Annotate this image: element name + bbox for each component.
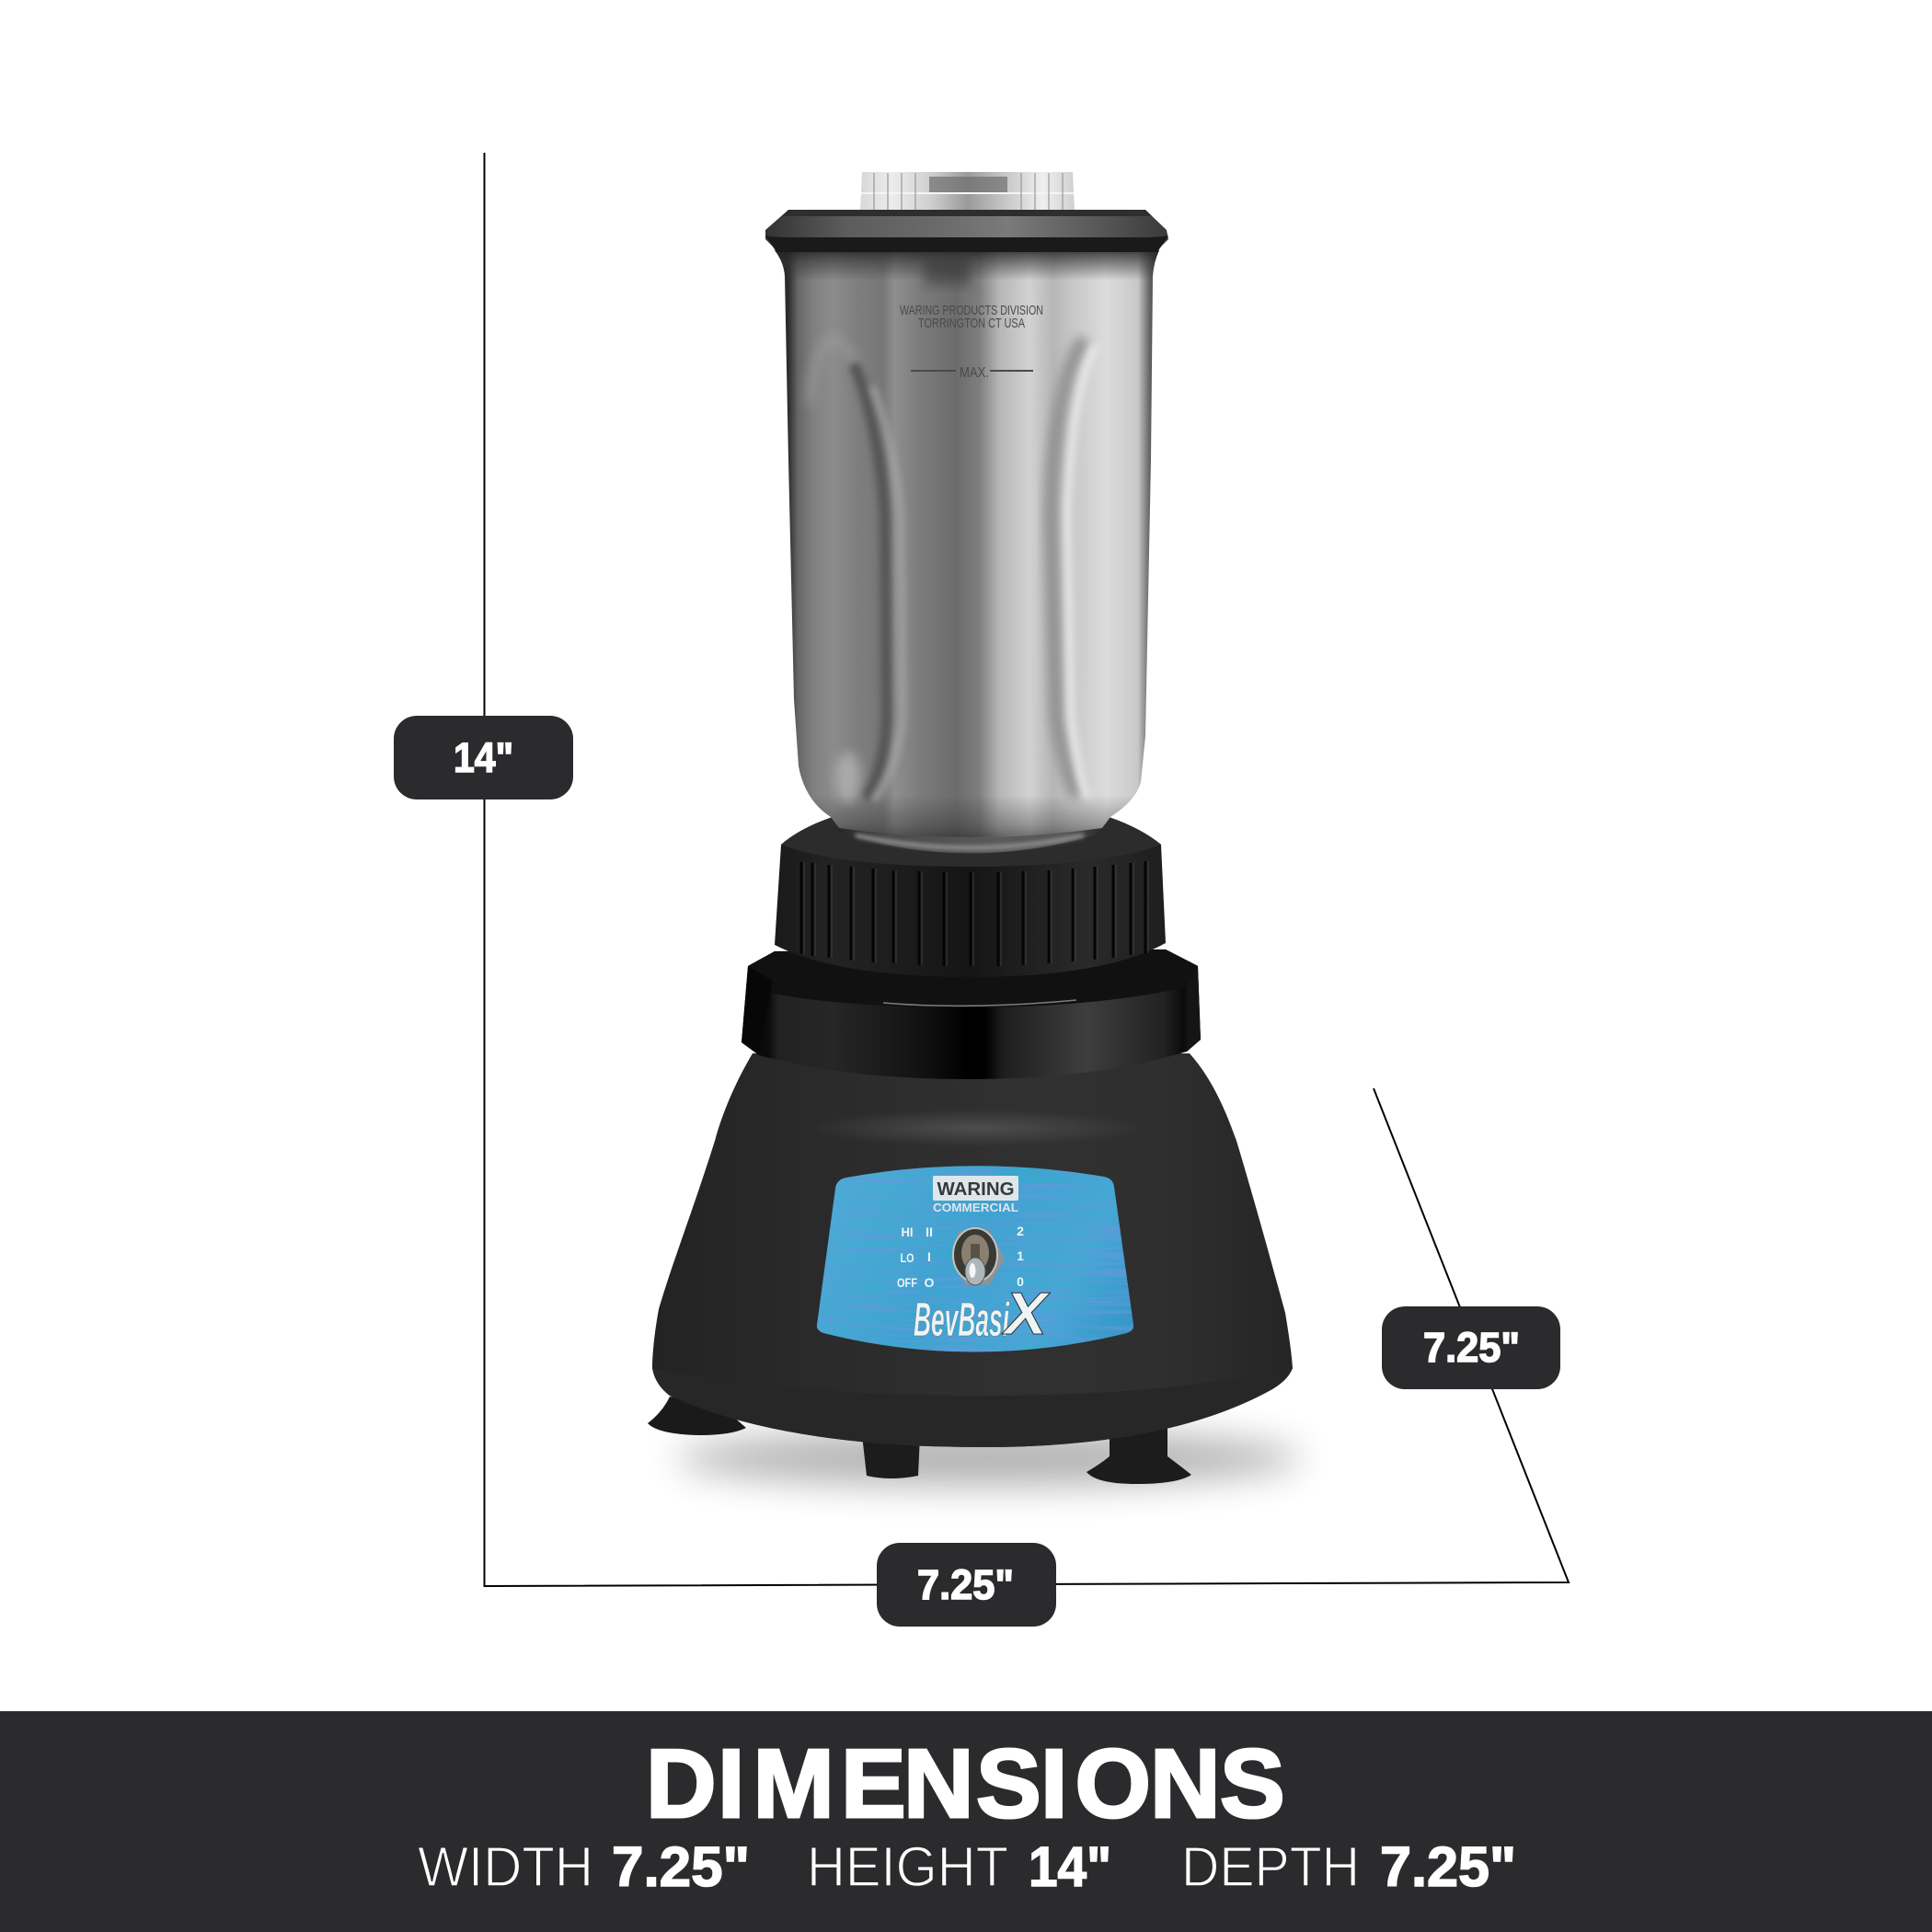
jar lettering: WARING PRODUCTS DIVISION	[900, 303, 1043, 318]
floor shadow	[676, 1431, 1302, 1486]
measurements line	[418, 1835, 1516, 1898]
BevBasiX logo	[914, 1280, 1051, 1347]
measurements line: 7.25"	[1380, 1835, 1516, 1898]
BevBasiX logo: X	[1002, 1280, 1051, 1347]
height value pill: 14"	[454, 734, 513, 781]
switch position labels: OFF	[897, 1275, 917, 1290]
left foot	[648, 1397, 746, 1435]
jar collar	[775, 817, 1166, 977]
motor base	[652, 1053, 1293, 1447]
blender product	[648, 172, 1302, 1486]
jar lid	[765, 210, 1168, 252]
clear lid cap	[860, 172, 1075, 212]
jar top shadow	[925, 259, 971, 285]
switch position labels: 0	[1017, 1274, 1024, 1289]
width value pill	[877, 1543, 1056, 1627]
control label	[817, 1166, 1133, 1352]
BevBasiX logo: BevBasi	[914, 1294, 1010, 1347]
base glossy band	[742, 949, 1201, 1079]
left jar rib	[810, 339, 857, 405]
collar ribs	[801, 861, 1145, 966]
switch position labels: II	[926, 1225, 933, 1239]
front foot	[862, 1435, 920, 1478]
switch position labels: O	[925, 1275, 935, 1290]
height value pill	[394, 716, 573, 799]
measurements line: HEIGHT	[807, 1835, 1008, 1898]
stainless steel jar	[775, 250, 1159, 837]
measurements line: WIDTH	[418, 1835, 593, 1898]
depth and width dimension lines	[484, 153, 1569, 1586]
switch position labels: 1	[1017, 1248, 1024, 1263]
switch position labels: HI	[902, 1225, 913, 1239]
jar lettering: MAX.	[960, 365, 989, 381]
base lower lip	[652, 1368, 1293, 1447]
right foot	[1087, 1426, 1191, 1484]
water texture	[817, 1167, 1133, 1352]
Waring Commercial logo: COMMERCIAL	[933, 1202, 1018, 1214]
switch position labels: LO	[900, 1250, 914, 1265]
heading: DIMENSIONS	[646, 1730, 1285, 1838]
right jar rib	[1051, 339, 1084, 798]
toggle switch	[951, 1228, 1005, 1285]
base top highlight	[805, 1110, 1145, 1146]
footer banner	[0, 1711, 1932, 1932]
jar lettering	[900, 303, 1043, 381]
jar lettering: TORRINGTON CT USA	[918, 316, 1025, 331]
width value pill: 7.25"	[917, 1561, 1014, 1608]
switch position labels: 2	[1017, 1224, 1024, 1238]
switch position labels: I	[927, 1249, 931, 1264]
band top face	[748, 949, 1198, 1007]
measurements line: 14"	[1029, 1835, 1111, 1898]
measurements line: 7.25"	[612, 1835, 750, 1898]
Waring Commercial logo	[933, 1176, 1018, 1214]
depth value pill	[1382, 1306, 1560, 1389]
switch position labels	[897, 1224, 1024, 1290]
jar neck ring	[833, 814, 1109, 854]
measurements line: DEPTH	[1181, 1835, 1360, 1898]
Waring Commercial logo: WARING	[937, 1179, 1014, 1200]
depth value pill: 7.25"	[1423, 1324, 1520, 1371]
